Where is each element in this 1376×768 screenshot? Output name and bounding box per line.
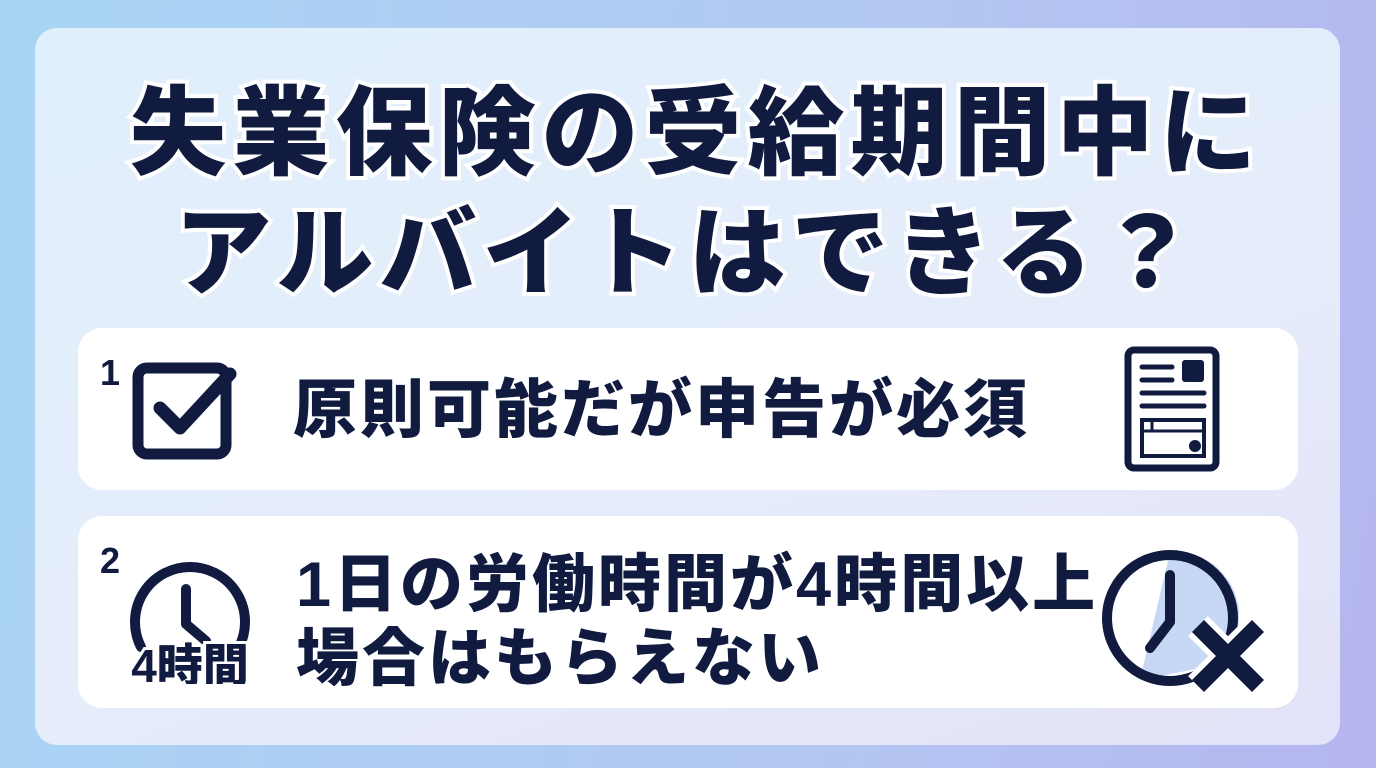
text: 原則可能: 原則可能だが申告が必須 [293, 374, 1030, 446]
icon: document [1124, 346, 1220, 472]
number 2: 2 [100, 540, 120, 581]
icon: clock 4時間 [130, 562, 250, 684]
number 1: 1 [100, 352, 120, 393]
icon: checkbox [132, 362, 236, 460]
text: 労働時間: 場合はもらえない [296, 624, 824, 694]
text: 労働時間: 1日の労働時間が4時間以上 [296, 550, 1098, 620]
text: 労働時間 [296, 550, 1098, 694]
card 1 [78, 328, 1298, 490]
title line 1: 失業保険の受給期間中に [130, 79, 1262, 188]
title line 2: アルバイトはできる？ [174, 199, 1202, 308]
title [124, 78, 1262, 308]
icon: clock with X [1102, 550, 1264, 692]
card 2 [78, 516, 1298, 708]
